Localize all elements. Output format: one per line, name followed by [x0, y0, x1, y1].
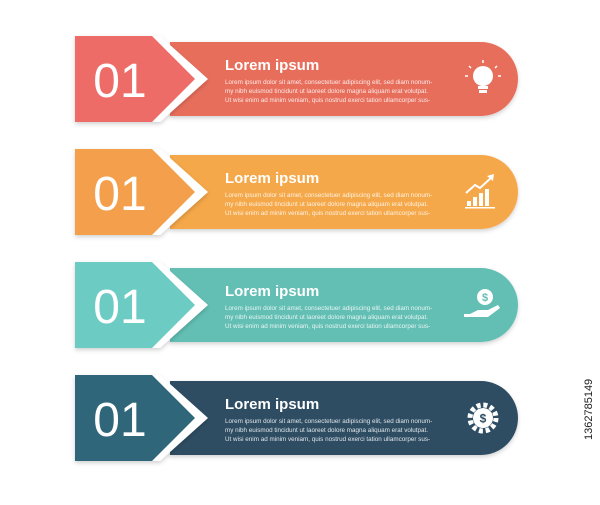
number 4: 01: [93, 394, 147, 447]
number 1: 01: [93, 55, 147, 108]
bar 3: [170, 268, 518, 342]
icon: hand with coin: $: [482, 292, 488, 304]
chevron 3: [75, 262, 208, 348]
text block 2: Lorem ipsum dolor sit amet, consectetuer adipiscing elit, sed diam nonum-: [225, 192, 432, 199]
text block 2: Ut wisi enim ad minim veniam, quis nostrud exerci tation ullamcorper sus-: [225, 210, 430, 217]
text block 1: my nibh euismod tincidunt ut laoreet dolore magna aliquam erat volutpat.: [225, 88, 428, 95]
icon: growth chart: [465, 174, 495, 208]
row 4: [75, 375, 518, 461]
text block 3: [225, 283, 432, 330]
text block 1: [225, 57, 432, 104]
chevron 2: [75, 149, 208, 235]
icon: light bulb: [465, 60, 501, 93]
icon: hand with coin: [464, 289, 500, 317]
text block 3: Ut wisi enim ad minim veniam, quis nostrud exerci tation ullamcorper sus-: [225, 323, 430, 330]
number block 4: [75, 375, 195, 461]
row 2: [75, 149, 518, 235]
text block 3: Lorem ipsum dolor sit amet, consectetuer adipiscing elit, sed diam nonum-: [225, 305, 432, 312]
bar 2: [170, 155, 518, 229]
number block 1: [75, 36, 195, 122]
number block 2: [75, 149, 195, 235]
text block 1: Lorem ipsum dolor sit amet, consectetuer adipiscing elit, sed diam nonum-: [225, 79, 432, 86]
number block 3: [75, 262, 195, 348]
number 3: 01: [93, 281, 147, 334]
text block 2: my nibh euismod tincidunt ut laoreet dolore magna aliquam erat volutpat.: [225, 201, 428, 208]
number 2: 01: [93, 168, 147, 221]
text block 1: Lorem ipsum: [225, 57, 319, 74]
text block 2: [225, 170, 432, 217]
text block 4: my nibh euismod tincidunt ut laoreet dolore magna aliquam erat volutpat.: [225, 427, 428, 434]
chevron 1: [75, 36, 208, 122]
icon: gear with dollar: [470, 405, 496, 431]
text block 4: Ut wisi enim ad minim veniam, quis nostrud exerci tation ullamcorper sus-: [225, 436, 430, 443]
text block 3: Lorem ipsum: [225, 283, 319, 300]
text block 4: Lorem ipsum: [225, 396, 319, 413]
text block 4: Lorem ipsum dolor sit amet, consectetuer adipiscing elit, sed diam nonum-: [225, 418, 432, 425]
text block 4: [225, 396, 432, 443]
chevron 4: [75, 375, 208, 461]
text block 1: Ut wisi enim ad minim veniam, quis nostrud exerci tation ullamcorper sus-: [225, 97, 430, 104]
icon: gear with dollar: $: [480, 412, 487, 426]
text block 3: my nibh euismod tincidunt ut laoreet dolore magna aliquam erat volutpat.: [225, 314, 428, 321]
bar 4: [170, 381, 518, 455]
row 3: [75, 262, 518, 348]
row 1: [75, 36, 518, 122]
bar 1: [170, 42, 518, 116]
watermark id: 1362785149: [583, 379, 595, 440]
text block 2: Lorem ipsum: [225, 170, 319, 187]
